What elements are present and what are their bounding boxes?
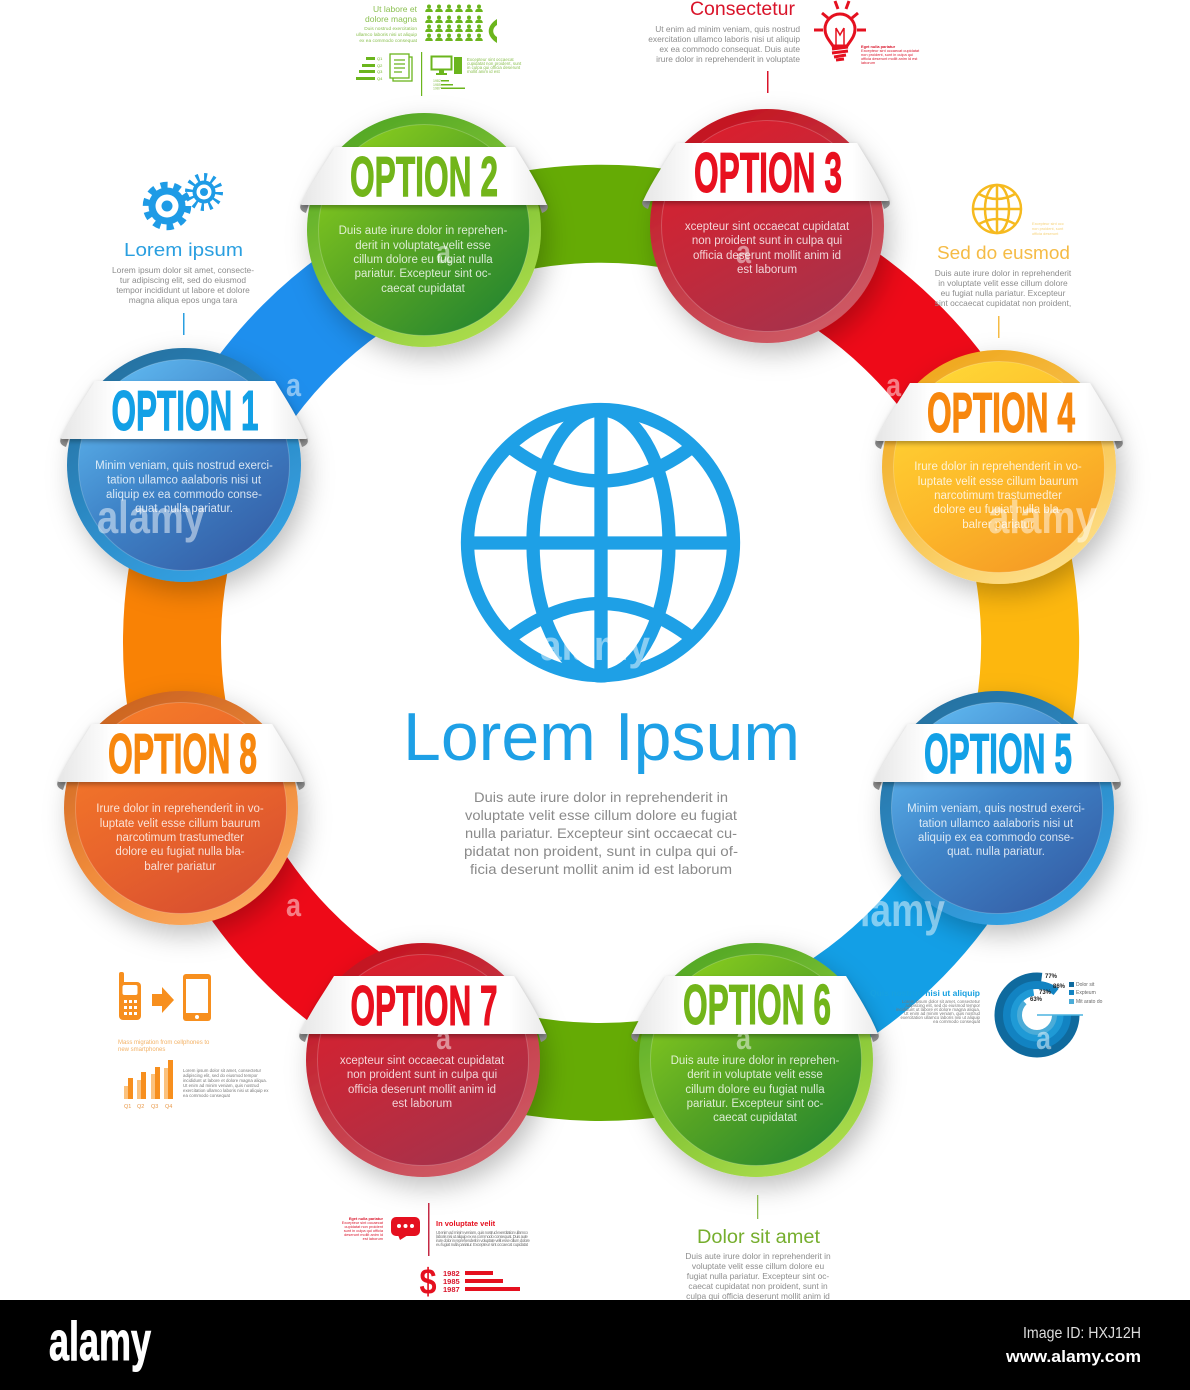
text: central description: Duis aute irure dolor in reprehenderit in (474, 789, 728, 805)
text: donut note: Lorem ipsum dolor sit amet, consectetur (902, 999, 981, 1004)
text: option 3 body: xcepteur sint occaecat cupidatat (685, 221, 850, 233)
callout: donut chart (870, 974, 1103, 1053)
footer bar (0, 1300, 1190, 1390)
callout: green data icons (356, 4, 522, 96)
text: Dolor sit amet body: voluptate velit esse cillum dolore eu (692, 1261, 824, 1271)
text: option 2 body: cillum dolore eu fugiat nulla (353, 254, 493, 266)
band: green top (433, 214, 762, 248)
text: option 6 body: derit in voluptate velit esse (687, 1069, 823, 1081)
heading: Lorem ipsum: Lorem ipsum (124, 239, 243, 260)
panel: option 2 (300, 113, 548, 347)
chart: small bars (433, 79, 465, 90)
text: red tiny caption: sunt in culpa qui officia (344, 1228, 384, 1233)
chart: small bars: 1987 (433, 86, 441, 90)
text: chart note: Ut enim ad minim veniam, quis nostrud (183, 1083, 259, 1088)
watermarks: alamy (97, 491, 205, 543)
panel: option 4 (875, 350, 1123, 584)
text: yellow tiny caption: non proident, sunt (1032, 226, 1064, 231)
text: option 7 body: non proident sunt in culpa qui (347, 1069, 497, 1081)
text: option 4 body: balrer pariatur (962, 519, 1034, 531)
heading: option 2: OPTION 2 (350, 145, 498, 209)
text: option 3 body: non proident sunt in culpa qui (692, 235, 842, 247)
heading: In voluptate velit: In voluptate velit (436, 1219, 496, 1228)
text: option 6 body: pariatur. Excepteur sint oc- (687, 1098, 824, 1110)
title: Lorem Ipsum (403, 699, 800, 775)
icon: yellow globe (973, 185, 1021, 233)
text: option 5 body: tation ullamco aalaboris nisi ut (919, 818, 1074, 830)
watermarks: alamy (540, 622, 651, 669)
band: red lower left (202, 800, 433, 1038)
text: central description: pidatat non proident, sunt in culpa qui of- (464, 843, 738, 859)
band: blue upper left (206, 248, 433, 475)
callout: phones and bar chart (118, 972, 269, 1110)
legend: donut: Mit arato do (1076, 999, 1103, 1005)
chart: quarterly bars: Q1 (124, 1104, 131, 1110)
watermarks: lamy (860, 884, 945, 936)
text: option 1 body: aliquip ex ea commodo conse- (106, 489, 262, 501)
icon: central globe (468, 410, 734, 676)
text: option 1 body: tation ullamco aalaboris nisi ut (107, 474, 262, 486)
watermarks: a (886, 367, 901, 403)
watermarks: a (736, 1020, 751, 1056)
text: green small caption: in culpa qui officia deserunt (467, 65, 521, 70)
text: donut percentages: 73% (1039, 990, 1052, 996)
text: option 6 body: caecat cupidatat (713, 1112, 798, 1124)
heading: Ut labore et dolore magna: dolore magna (365, 14, 417, 24)
watermarks: alamy (988, 491, 1097, 543)
panel: option 6 (631, 943, 879, 1177)
text: option 3 body: officia deserunt mollit anim id (693, 250, 841, 262)
chart: stacked bars: Q4 (377, 76, 383, 81)
footer: image id: Image ID: HXJ12H (1023, 1325, 1141, 1342)
text: donut percentages: 86% (1053, 984, 1066, 990)
chart: small bars: 1985 (433, 83, 441, 87)
text: Lorem ipsum body: magna aliqua epos unga tara (129, 295, 238, 305)
text: bulb caption: laborum (861, 60, 875, 65)
text: option 8 body: luptate velit esse cillum baurum (100, 818, 260, 830)
text: Sed do eusmod body: sint occaecat cupidatat non proident, (935, 298, 1071, 308)
callout: Consectetur (648, 0, 920, 93)
text: green small body: ex ea commodo consequat (359, 38, 418, 44)
text: red tiny caption: cupidatat non proident (344, 1224, 384, 1229)
callout: gears, Lorem ipsum (112, 177, 254, 335)
arrow: cell phone to smartphone (152, 987, 174, 1013)
chart: small bars: 1982 (433, 79, 441, 83)
text: central description: ficia deserunt mollit anim id est laborum (470, 861, 732, 877)
text: Dolor sit amet body: culpa qui officia deserunt mollit anim id (686, 1291, 830, 1301)
icon: dollar sign: $ (420, 1261, 436, 1302)
chart: years bars: 1985 (443, 1277, 460, 1286)
legend: donut: Dolor sit (1076, 982, 1095, 988)
band: orange left (172, 475, 206, 800)
text: bulb caption: officia deserunt mollit anim id est (861, 56, 918, 61)
text: option 2 body: Duis aute irure dolor in reprehen- (339, 225, 508, 237)
text: Consectetur body: Ut enim ad minim veniam, quis nostrud (655, 24, 800, 34)
text: Lorem ipsum body: tur adipiscing elit, sed do eiusmod (120, 275, 246, 285)
text: option 4 body: luptate velit esse cillum baurum (918, 476, 1078, 488)
callout: Dolor sit amet (685, 1195, 831, 1301)
panel: option 8 (57, 691, 305, 925)
chart: donut (999, 977, 1083, 1053)
text: donut note: adipiscing elit, sed do eiusmod tempor (905, 1003, 981, 1008)
heading: option 8: OPTION 8 (108, 722, 257, 786)
legend: donut (1069, 982, 1103, 1005)
text: option 1 body: Minim veniam, quis nostrud exerci- (95, 460, 273, 472)
text: donut note: Ut enim ad minim veniam, quis nostrud (904, 1011, 981, 1016)
text: voluptate body: Ut enim ad minim veniam, quis nostrud exercitation ullamco (436, 1230, 529, 1235)
text: option 6 body: Duis aute irure dolor in reprehen- (671, 1055, 840, 1067)
panel: option 5 (873, 691, 1121, 925)
watermarks: a (286, 367, 301, 403)
text: central description: voluptate velit esse cillum dolore eu fugiat (465, 807, 737, 823)
callout: red speech and dollar (342, 1203, 531, 1302)
text: Consectetur body: exercitation ullamco laboris nisi ut aliquip (648, 34, 800, 44)
watermarks: a (736, 234, 751, 270)
text: option 4 body: dolore eu fugiat nulla bla- (933, 504, 1063, 516)
chart: stacked bars: Q1 (377, 56, 383, 61)
chart: years bars (443, 1269, 520, 1294)
heading: Ut labore et dolore magna: Ut labore et (373, 4, 418, 14)
text: voluptate body: irure dolor in reprehenderit in voluptate velit esse cillum dolore (436, 1238, 531, 1243)
watermarks: a (436, 1020, 451, 1056)
text: option 4 body: Irure dolor in reprehenderit in vo- (914, 461, 1082, 473)
text: option 3 body: est laborum (737, 264, 797, 276)
band: yellow right (993, 468, 1030, 808)
chart: quarterly bars: Q3 (151, 1104, 158, 1110)
text: Dolor sit amet body: Duis aute irure dolor in reprehenderit in (685, 1251, 831, 1261)
heading: option 4: OPTION 4 (927, 381, 1075, 445)
heading: option 5: OPTION 5 (924, 722, 1072, 786)
watermarks: a (286, 887, 301, 923)
text: donut note: exercitation ullamco laboris nisi ut aliquip (900, 1015, 981, 1020)
icon: gears (146, 177, 219, 227)
text: Sed do eusmod body: in voluptate velit esse cillum dolore (938, 278, 1068, 288)
text: option 5 body: quat. nulla pariatur. (947, 846, 1045, 858)
icon: people grid (425, 4, 483, 41)
watermarks: a (436, 234, 451, 270)
text: option 8 body: Irure dolor in reprehenderit in vo- (96, 803, 264, 815)
text: option 2 body: caecat cupidatat (381, 283, 466, 295)
heading: option 7: OPTION 7 (350, 974, 498, 1038)
text: red tiny caption: Eget nulla pariatur (349, 1216, 383, 1221)
chart: quarterly bars (124, 1060, 173, 1110)
text: option 8 body: dolore eu fugiat nulla bla- (115, 846, 245, 858)
text: option 7 body: xcepteur sint occaecat cupidatat (340, 1055, 505, 1067)
text: donut percentages: 77% (1045, 974, 1058, 980)
footer: website: www.alamy.com (1005, 1347, 1141, 1366)
band: blue lower right (750, 808, 997, 1045)
text: option 1 body: quat. nulla pariatur. (135, 503, 233, 515)
text: migration caption: Mass migration from cellphones to (118, 1040, 210, 1046)
text: option 5 body: aliquip ex ea commodo conse- (918, 832, 1074, 844)
footer: alamy logo: alamy (49, 1310, 151, 1372)
text: option 5 body: Minim veniam, quis nostrud exerci- (907, 803, 1085, 815)
text: option 6 body: cillum dolore eu fugiat nulla (685, 1084, 825, 1096)
panel: option 3 (642, 109, 890, 343)
text: red tiny caption: Excepteur sint occaecat (342, 1220, 384, 1225)
text: chart note: ea commodo consequat (183, 1093, 231, 1098)
text: Dolor sit amet body: caecat cupidatat non proident, sunt in (688, 1281, 828, 1291)
icon: speech bubble (391, 1217, 420, 1240)
text: option 8 body: balrer pariatur (144, 861, 216, 873)
text: option 4 body: narcotimum trastumedter (934, 490, 1062, 502)
heading: nisi ut aliquip: Quis nostrud nisi ut aliquip (870, 988, 980, 998)
icon: smartphone (183, 974, 211, 1021)
text: chart note: Lorem ipsum dolor sit amet, consectetur (183, 1068, 262, 1073)
text: chart note: exercitation ullamco laboris nisi ut aliquip ex (183, 1088, 269, 1093)
chart: quarterly bars: Q4 (165, 1104, 172, 1110)
text: option 7 body: est laborum (392, 1098, 452, 1110)
text: green small body: ullamco laboris nisi ut aliquip (356, 32, 417, 38)
text: central description: nulla pariatur. Excepteur sint occaecat cu- (465, 825, 737, 841)
icon: cell phone (119, 972, 141, 1020)
text: red tiny caption: est laborum (363, 1236, 383, 1241)
text: option 7 body: officia deserunt mollit anim id (348, 1084, 496, 1096)
chart: stacked bars: Q3 (377, 69, 383, 74)
text: voluptate body: eu fugiat nulla pariatur. Excepteur sint occaecat cupidatat (436, 1242, 529, 1247)
text: red tiny caption: deserunt mollit anim id (344, 1232, 383, 1237)
text: Consectetur body: ex ea commodo consequat. Duis aute (659, 44, 800, 54)
text: Sed do eusmod body: Duis aute irure dolor in reprehenderit (935, 268, 1072, 278)
chart: stacked bars (356, 56, 383, 81)
text: donut note: incididunt ut labore et dolore magna aliqua. (896, 1007, 980, 1012)
text: Sed do eusmod body: eu fugiat nulla pariatur. Excepteur (941, 288, 1066, 298)
band: red upper right (762, 245, 993, 468)
chart: stacked bars: Q2 (377, 63, 383, 68)
text: migration caption: new smartphones (118, 1047, 165, 1053)
heading: option 6: OPTION 6 (683, 973, 831, 1037)
text: option 8 body: narcotimum trastumedter (116, 832, 244, 844)
text: green small body: Duis nostrud exercitation (364, 26, 417, 32)
text: chart note: adipiscing elit, sed do eiusmod tempor (183, 1073, 258, 1078)
chart: years bars: 1982 (443, 1269, 460, 1278)
text: donut percentages: 63% (1030, 997, 1043, 1003)
icon: documents (390, 54, 412, 81)
text: chart note: incididunt ut labore et dolore magna aliqua. (183, 1078, 267, 1083)
watermarks (97, 234, 1097, 1056)
text: central description (464, 789, 738, 877)
text: green small caption: mollit anim id est (467, 69, 500, 74)
text: Consectetur body: irure dolor in reprehenderit in voluptate (656, 54, 800, 64)
legend: donut: Expteum (1076, 990, 1096, 996)
callout: Sed do eusmod (935, 185, 1072, 338)
text: green small caption: cupidatat non proident, sunt (467, 61, 522, 66)
text: voluptate body: laboris nisi ut aliquip ex ea commodo consequat. Duis aute (436, 1234, 529, 1239)
text: bulb caption: Excepteur sint occaecat cupidatat (861, 48, 920, 53)
text: Dolor sit amet body: fugiat nulla pariatur. Excepteur sint oc- (687, 1271, 829, 1281)
icon: desktop computer (432, 56, 462, 75)
watermarks: a (1036, 1020, 1051, 1056)
text: Lorem ipsum body: tempor incididunt ut labore et dolore (116, 285, 250, 295)
text: yellow tiny caption: officia deserunt (1032, 231, 1059, 236)
text: bulb caption: non proident, sunt in culpa qui (861, 52, 913, 57)
band: green bottom (433, 1038, 750, 1072)
text: Lorem ipsum body: Lorem ipsum dolor sit amet, consecte- (112, 265, 254, 275)
heading: option 3: OPTION 3 (694, 141, 842, 205)
text: green small caption: Excepteur sint occaecat (467, 57, 514, 62)
text: donut note: ea commodo consequat (933, 1019, 981, 1024)
text: bulb caption: Eget nulla pariatur (861, 44, 896, 49)
ring of coloured bands (172, 214, 1030, 1072)
heading: Dolor sit amet: Dolor sit amet (697, 1227, 821, 1248)
heading: Sed do eusmod: Sed do eusmod (937, 242, 1070, 263)
text: yellow tiny caption: Excepteur sint occ (1032, 221, 1064, 226)
icon: telephone (489, 19, 497, 43)
chart: quarterly bars: Q2 (137, 1104, 144, 1110)
chart: years bars: 1987 (443, 1285, 460, 1294)
text: option 2 body: pariatur. Excepteur sint oc- (355, 268, 492, 280)
heading: option 1: OPTION 1 (112, 379, 258, 443)
panel: option 7 (299, 943, 547, 1177)
text: option 2 body: derit in voluptate velit esse (355, 240, 491, 252)
panel: option 1 (60, 348, 308, 582)
icon: light bulb (814, 1, 866, 60)
